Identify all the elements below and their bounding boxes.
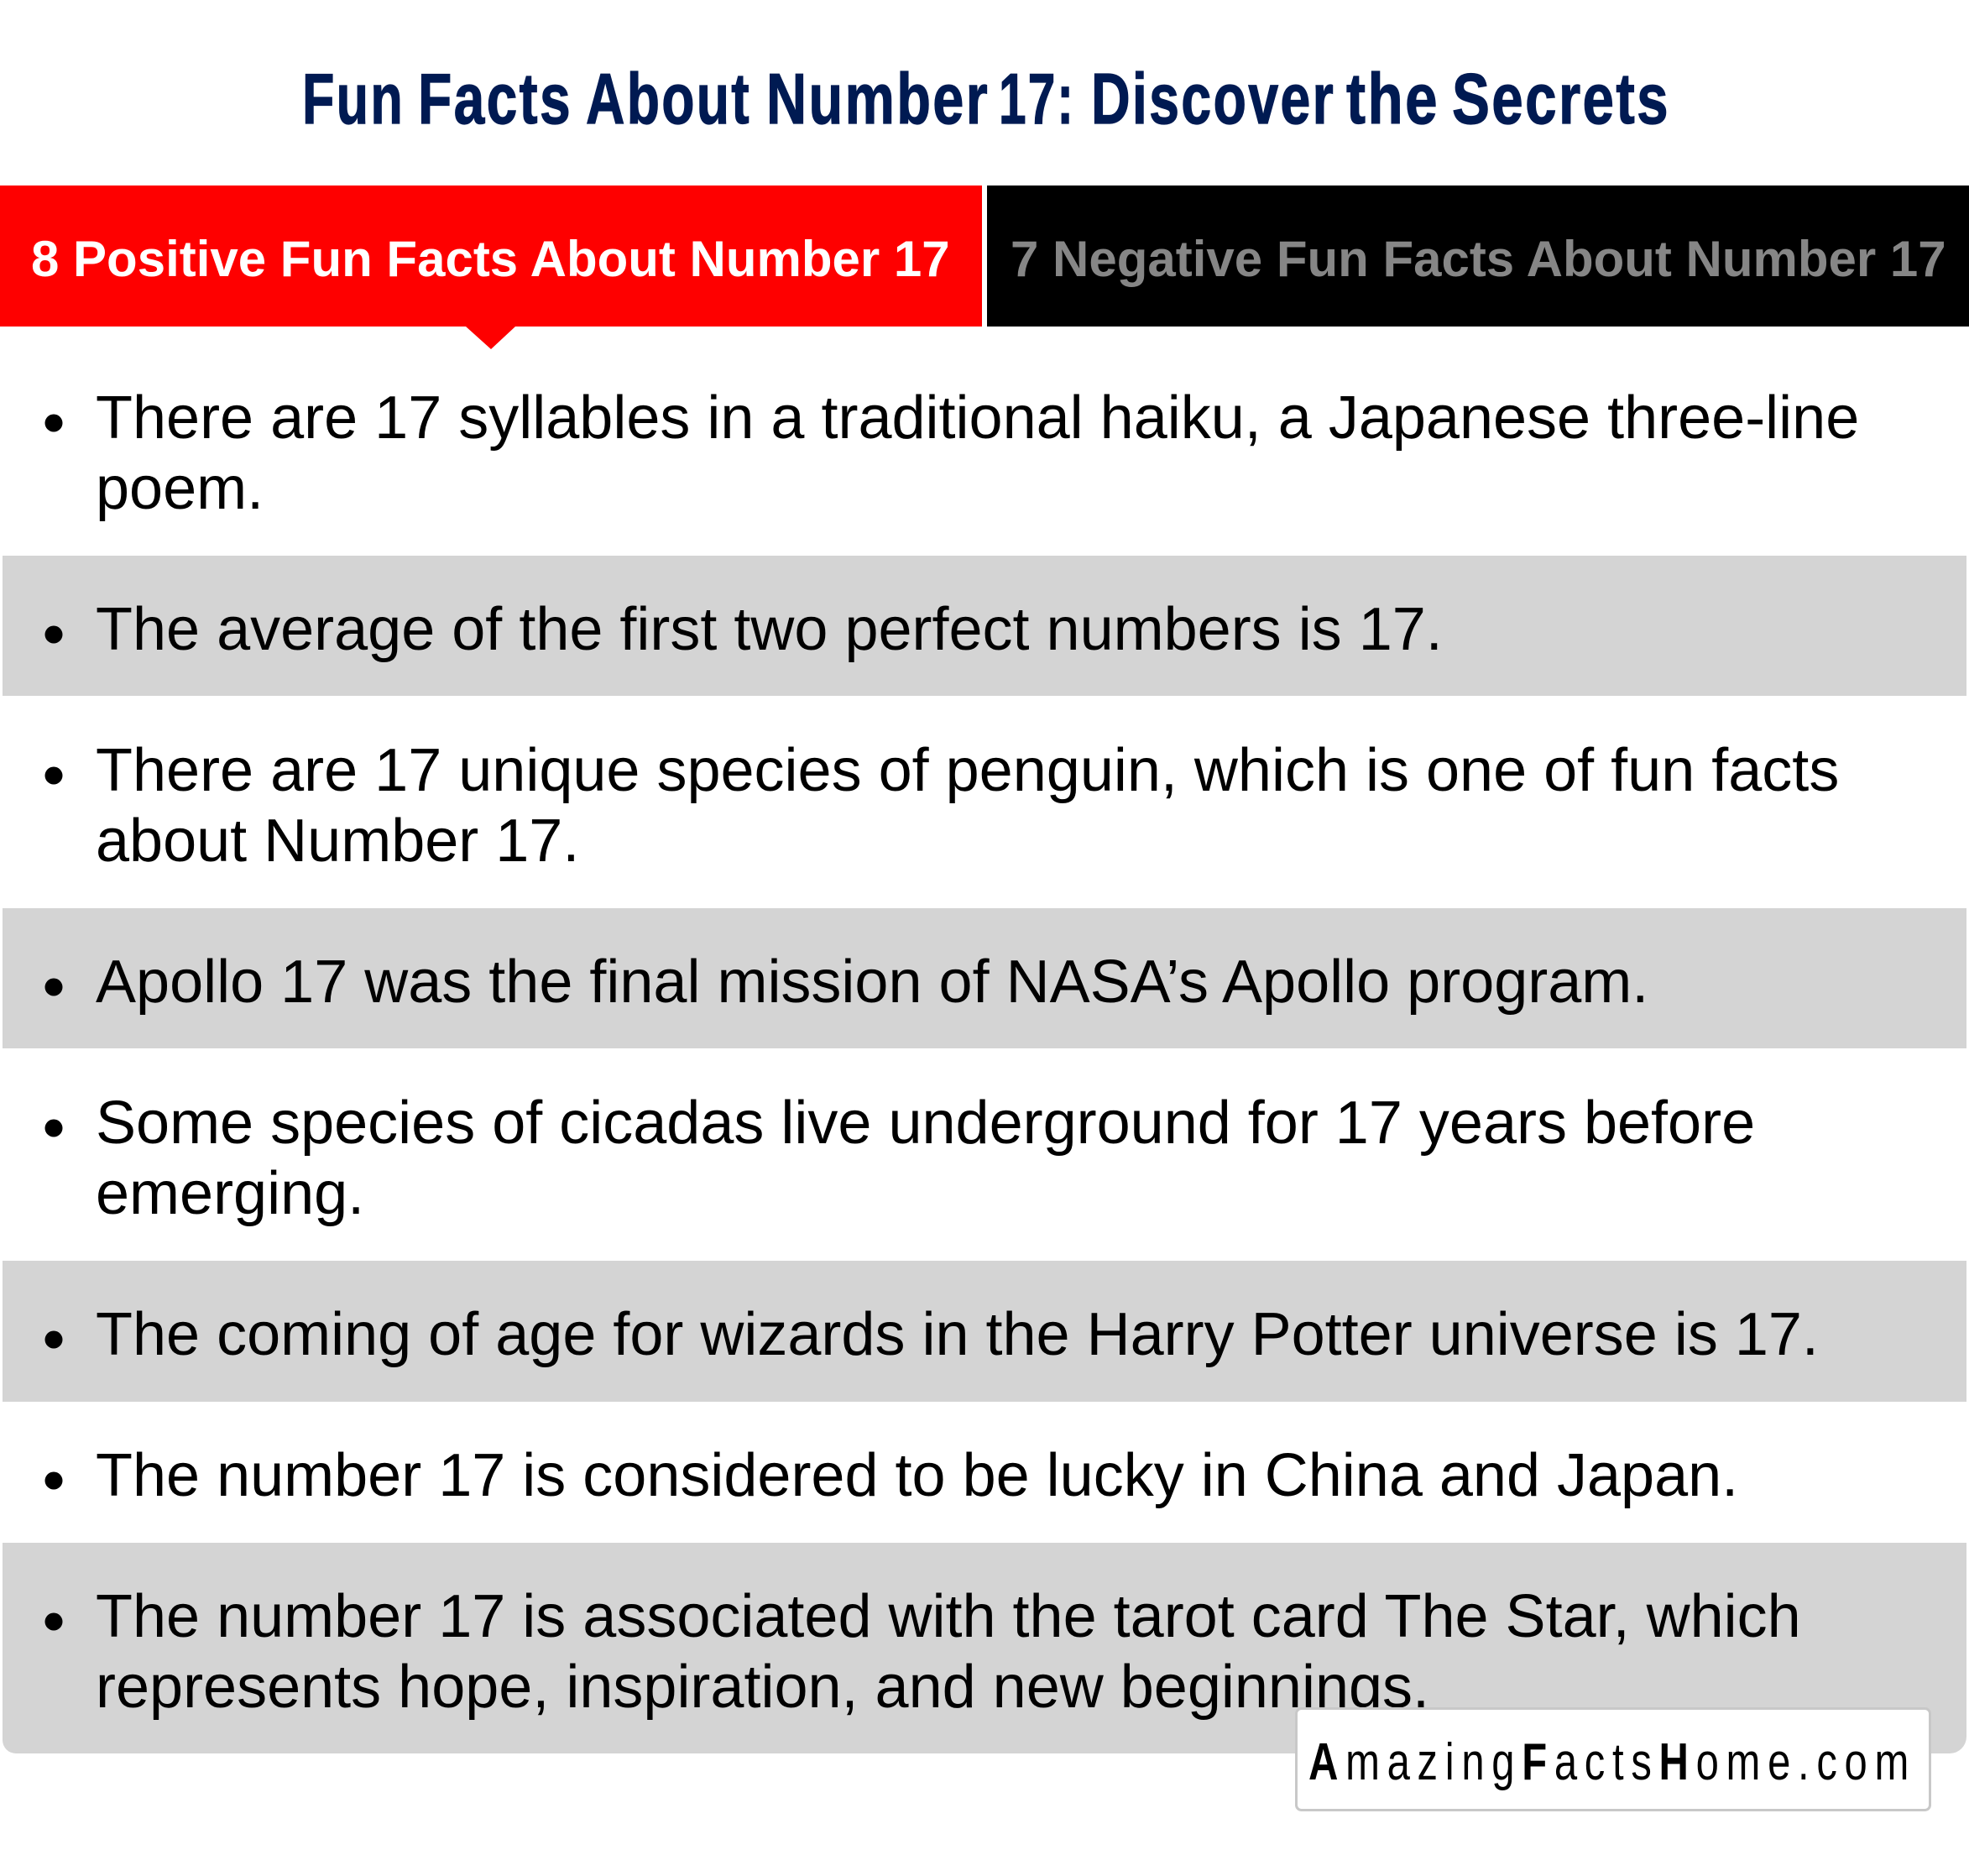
fact 5: Some species of cicadas live underground for 17 years before	[96, 1090, 1755, 1157]
fact 5	[45, 1090, 1755, 1227]
fact 2	[3, 556, 1966, 696]
title: Facts	[418, 60, 572, 139]
watermark: AmazingFactsHome.com	[1308, 1733, 1916, 1791]
fact 1: There are 17 syllables in a traditional haiku, a Japanese three-line	[96, 384, 1859, 452]
fact 4: Apollo 17 was the final mission of NASA’s Apollo program.	[96, 948, 1648, 1016]
title	[302, 60, 1670, 139]
title: the	[1346, 60, 1439, 139]
fact 2: The average of the first two perfect numbers is 17.	[96, 596, 1443, 663]
fact 7: The number 17 is considered to be lucky in China and Japan.	[96, 1442, 1738, 1509]
tab: positive facts: 8 Positive Fun Facts About Number 17	[31, 231, 950, 287]
title: Secrets	[1452, 60, 1670, 139]
fact 5: emerging.	[96, 1160, 364, 1227]
title: Discover	[1091, 60, 1335, 139]
fact 1	[45, 384, 1859, 522]
fact 8	[3, 1543, 1966, 1753]
fact 6	[3, 1261, 1966, 1402]
fact 3: There are 17 unique species of penguin, which is one of fun facts	[96, 737, 1839, 804]
title: About	[586, 60, 751, 139]
tab: negative facts	[987, 186, 1969, 327]
fact 8: represents hope, inspiration, and new beginnings.	[96, 1654, 1429, 1721]
tab: negative facts: 7 Negative Fun Facts About Number 17	[1011, 231, 1946, 287]
fact 3: about Number 17.	[96, 807, 579, 875]
fact 1: poem.	[96, 455, 264, 522]
title: 17:	[999, 60, 1075, 139]
fact 6: The coming of age for wizards in the Harry Potter universe is 17.	[96, 1301, 1819, 1368]
title: Number	[766, 60, 990, 139]
title: Fun	[302, 60, 405, 139]
fact 3	[45, 737, 1839, 875]
tab: positive facts	[0, 186, 982, 349]
watermark	[1296, 1709, 1930, 1810]
fact 4	[3, 908, 1966, 1048]
fact 8: The number 17 is associated with the tarot card The Star, which	[96, 1583, 1801, 1650]
